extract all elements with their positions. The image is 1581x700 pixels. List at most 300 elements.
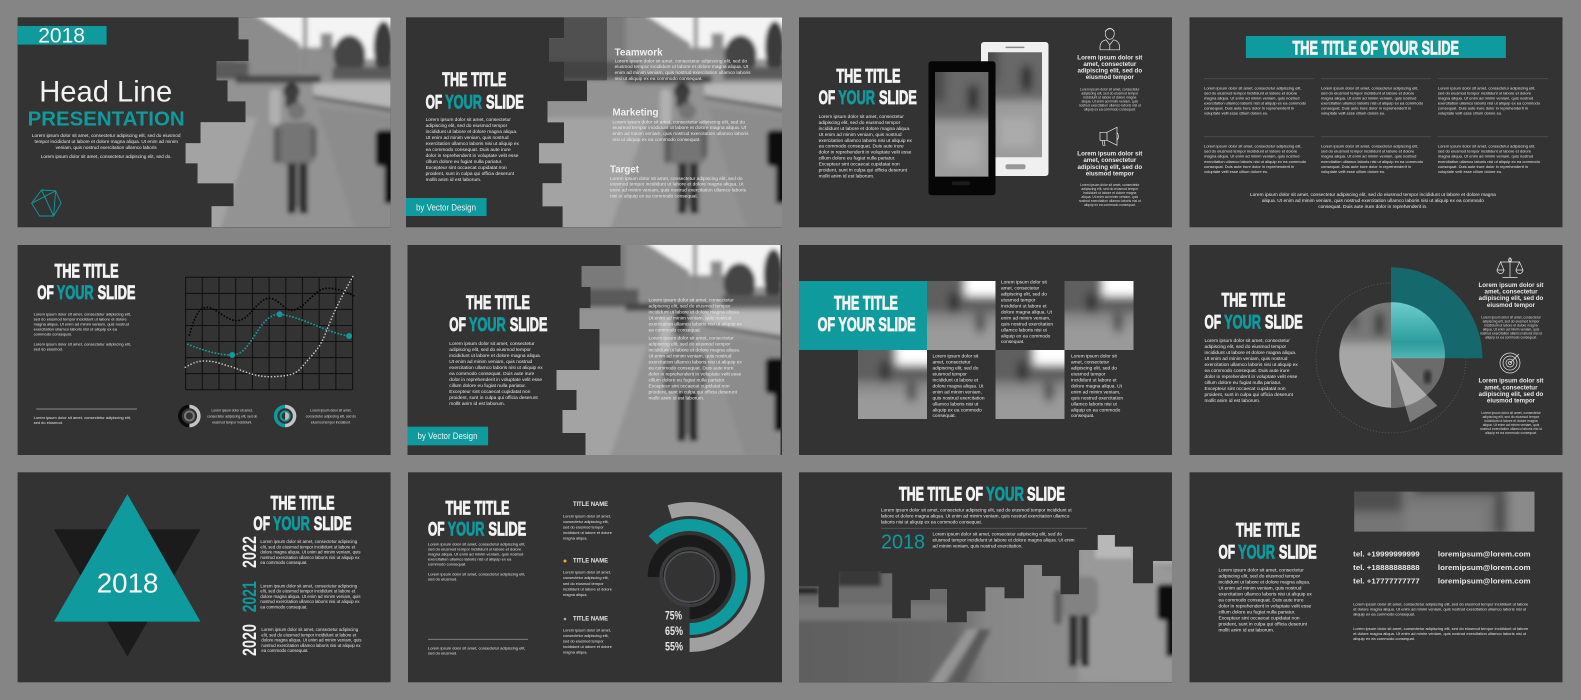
text over photo: Lorem ipsum dolor sit amet, consectetur: [648, 335, 734, 341]
phone numbers: tel. +19999999999: [1353, 550, 1420, 559]
title: YOUR: [469, 315, 506, 336]
footer note: sed do eiusmod.: [428, 650, 457, 655]
text tile three: adipiscing elit, sed do: [1071, 366, 1117, 372]
text tile two: adipiscing elit, sed do: [932, 366, 979, 372]
blurred photo banner: [1342, 480, 1547, 544]
text tile three: amet, consectetur: [1071, 360, 1110, 366]
body text: Excepteur sint occaecat cupidatat non: [449, 389, 531, 395]
feature text two: Lorem ipsum dolor sit amet, consectetur: [1080, 183, 1140, 187]
title: THE TITLE: [1236, 521, 1300, 542]
email addresses: loremipsum@lorem.com: [1438, 550, 1531, 559]
feature text two: eiusmod tempor: [1086, 170, 1134, 177]
phone numbers: [1353, 550, 1420, 585]
photo tile four: [984, 338, 1076, 431]
body text: Ut enim ad minim veniam, quis nostrud: [1204, 356, 1288, 362]
text column top right: voluptate velit esse cillum dolore eu.: [1438, 111, 1502, 116]
feature text one: nostrud exercitation ullamco laboris nisi ut: [1079, 103, 1141, 107]
text tile one: amet, consectetur: [1001, 286, 1040, 292]
title: SLIDE: [1265, 312, 1303, 333]
legend item one: incididunt ut labore et dolore: [563, 530, 612, 535]
feature text two: incididunt ut labore et dolore magna: [1484, 419, 1538, 423]
text column top right: sed do eiusmod tempor incididunt ut labore et dolore: [1438, 90, 1532, 95]
photo tile three: [846, 338, 939, 431]
photo tile two: [1052, 269, 1146, 362]
text tile two: quis nostrud exercitation: [932, 395, 985, 401]
panel: three column slide: [1190, 17, 1562, 227]
footer note: [428, 639, 528, 655]
body text: magna aliqua. Ut enim ad minim veniam, quis nostrud: [34, 322, 129, 326]
body text: Lorem ipsum dolor sit amet, consectetur adipiscing elit,: [34, 341, 131, 346]
panel: photo and text slide: [408, 245, 782, 455]
body text: proident, sunt in culpa qui officia deserunt: [1204, 392, 1294, 398]
body text: mollit anim id est laborum.: [1218, 628, 1274, 634]
text tile one: consequat.: [1001, 339, 1024, 345]
body text: Excepteur sint occaecat cupidatat non: [1218, 616, 1300, 622]
body text: exercitation ullamco laboris nisi ut aliquip ex ea: [428, 557, 512, 562]
target block: eiusmod tempor incididunt ut labore et dolore magna aliqua. Ut: [610, 182, 744, 188]
title: THE TITLE: [1222, 291, 1286, 312]
title: YOUR: [445, 92, 482, 113]
title: YOUR: [1224, 312, 1261, 333]
text over photo: incididunt ut labore et dolore magna aliqua.: [648, 347, 740, 353]
year label: 2018: [881, 531, 925, 553]
text column top middle: voluptate velit esse cillum dolore eu.: [1321, 111, 1385, 116]
line chart: [185, 274, 354, 390]
closing text: Lorem ipsum dolor sit amet, consectetur adipiscing elit, sed do eiusmod tempor incididunt ut labore et dolore magna: [1250, 192, 1496, 198]
email addresses: [1438, 550, 1531, 585]
title: [37, 262, 135, 304]
body text: sed do eiusmod tempor incididunt ut labore et dolore: [34, 316, 128, 321]
donut icon two: [276, 406, 295, 426]
body text: Lorem ipsum dolor sit amet, consectetur adipiscing elit,: [428, 541, 525, 546]
text tile one: ullamco laboris nisi ut: [1001, 327, 1048, 333]
legend item one: magna aliqua.: [563, 536, 587, 541]
title: YOUR: [448, 519, 485, 540]
title: SLIDE: [1027, 485, 1065, 506]
feature text two: [1479, 378, 1544, 435]
text tile one: adipiscing elit, sed do: [1001, 292, 1047, 298]
text tile one: enim ad minim veniam,: [1001, 315, 1050, 321]
title: SLIDE: [488, 519, 526, 540]
feature text two: nostrud exercitation ullamco laboris nisi ut: [1079, 199, 1141, 203]
note one: aliquip ex ea commodo consequat.: [1353, 611, 1415, 616]
teamwork block: nisi ut aliquip ex ea commodo consequat.: [615, 76, 703, 82]
text column top middle: magna aliqua. Ut enim ad minim veniam, quis nostrud: [1321, 95, 1416, 100]
body text: dolor in reprehenderit in voluptate velit esse: [819, 150, 912, 156]
body text: dolor in reprehenderit in voluptate velit esse: [449, 377, 542, 383]
intro text: laboris nisi ut aliquip ex ea commodo consequat.: [881, 519, 982, 524]
feature text two: aliquip ex ea commodo consequat.: [1485, 431, 1537, 435]
body text: cillum dolore eu fugiat nulla pariatur.: [1218, 610, 1295, 616]
body text: exercitation ullamco laboris nisi ut aliquip ex: [1204, 362, 1298, 368]
teal triangle: [54, 494, 201, 622]
note one: et dolore magna aliqua. Ut enim ad minim veniam, quis nostrud exercitation ullamco laboris nisi ut: [1353, 606, 1527, 611]
body text: cillum dolore eu fugiat nulla pariatur.: [1204, 380, 1281, 386]
feature text one: incididunt ut labore et dolore magna: [1484, 323, 1538, 327]
body text: dolor in reprehenderit in voluptate velit esse: [1218, 604, 1312, 610]
text tile one: aliquip ex ea commodo: [1001, 333, 1051, 339]
body text: exercitation ullamco laboris nisi ut aliquip ex ea: [34, 327, 118, 332]
panel: skyline photo slide: [799, 472, 1172, 682]
marketing block: enim ad minim veniam, quis nostrud exercitation ullamco laboris: [612, 131, 749, 137]
feature text one: aliquip ex ea commodo consequat.: [1485, 335, 1537, 339]
body text: Ut enim ad minim veniam, quis nostrud: [1218, 586, 1302, 592]
intro text: Lorem ipsum dolor sit amet, consectetur adipiscing elit, sed do.: [41, 154, 172, 159]
text tile one: Lorem ipsum dolor sit: [1001, 280, 1048, 286]
year text: Lorem ipsum dolor sit amet, consectetur adipiscing elit, sed do: [932, 532, 1062, 537]
body text: adipiscing elit, sed do eiusmod tempor: [426, 123, 508, 129]
text column top left: voluptate velit esse cillum dolore eu.: [1204, 111, 1268, 116]
text tile two: enim ad minim veniam,: [932, 389, 982, 395]
text column bottom left: Lorem ipsum dolor sit amet, consectetur adipiscing elit,: [1204, 144, 1301, 149]
title banner: THE TITLE OF YOUR SLIDE: [1292, 38, 1459, 59]
title: THE TITLE OF: [899, 485, 983, 506]
credit badge: by Vector Design: [416, 202, 476, 212]
legend item one: Lorem ipsum dolor sit amet,: [563, 513, 611, 518]
legend item three: sed do eiusmod tempor: [563, 638, 604, 643]
body text: Excepteur sint occaecat cupidatat non: [819, 162, 900, 168]
intro text: Lorem ipsum dolor sit amet, consectetur adipiscing elit, sed do eiusmod tempor incididunt ut: [881, 507, 1072, 512]
text column bottom left: exercitation ullamco laboris nisi ut aliquip ex ea commodo: [1204, 159, 1307, 164]
entry text 2021: elit, sed do eiusmod tempor incididunt ut labore et: [260, 589, 356, 594]
marketing block: nisi ut aliquip ex ea commodo consequat.: [612, 137, 700, 143]
legend item three: Lorem ipsum dolor sit amet,: [563, 627, 611, 632]
text column bottom right: magna aliqua. Ut enim ad minim veniam, quis nostrud: [1438, 154, 1533, 159]
panel: phones slide: [799, 17, 1172, 227]
teamwork block: enim ad minim veniam, quis nostrud exercitation ullamco laboris: [615, 70, 751, 76]
feature text one: aliquip ex ea commodo consequat.: [1084, 107, 1136, 111]
radial chart: [1316, 267, 1482, 433]
icon: megaphone: [1100, 127, 1118, 145]
feature text two: nostrud exercitation ullamco laboris nisi ut: [1480, 427, 1542, 431]
text column bottom left: voluptate velit esse cillum dolore eu.: [1204, 169, 1268, 174]
body text: proident, sunt in culpa qui officia deserunt: [1218, 622, 1308, 628]
marketing block: Lorem ipsum dolor sit amet, consectetur adipiscing elit, sed do: [612, 119, 745, 125]
body text: Ut enim ad minim veniam, quis nostrud: [426, 135, 509, 141]
title: OF: [819, 88, 835, 109]
text tile two: eiusmod tempor: [932, 372, 967, 378]
title: [428, 498, 526, 540]
title: [1204, 291, 1303, 333]
text over photo: exercitation ullamco laboris nisi ut aliquip ex: [648, 359, 742, 365]
title: SLIDE: [486, 92, 524, 113]
text column bottom right: voluptate velit esse cillum dolore eu.: [1438, 169, 1502, 174]
phone numbers: tel. +17777777777: [1353, 576, 1420, 585]
text over photo: Ut enim ad minim veniam, quis nostrud: [648, 316, 732, 322]
text column bottom right: consequat. Duis aute irure dolor in reprehenderit in: [1438, 164, 1528, 169]
panel: contact slide: [1190, 472, 1562, 682]
feature text two: amet, consectetur: [1083, 157, 1137, 164]
text over photo: mollit anim id est laborum.: [648, 395, 704, 401]
feature text one: adipiscing elit, sed do eiusmod tempor: [1483, 319, 1540, 323]
year text: ad minim veniam, quis nostrud exercitation.: [932, 543, 1023, 548]
feature text one: amet, consectetur: [1485, 289, 1538, 296]
title: OF: [449, 315, 466, 336]
entry text 2022: ea commodo consequat.: [260, 560, 307, 565]
text tile three: Lorem ipsum dolor sit: [1071, 354, 1118, 360]
body text: sed do eiusmod tempor incididunt ut labore et dolore: [428, 546, 522, 551]
feature text two: [1077, 151, 1142, 207]
entry text 2022: elit, sed do eiusmod tempor incididunt ut labore et: [260, 544, 356, 549]
text tile three: dolore magna aliqua. Ut: [1071, 383, 1123, 389]
body text: Ut enim ad minim veniam, quis nostrud: [819, 132, 902, 138]
feature text one: aliqua. Ut enim ad minim veniam, quis: [1483, 327, 1540, 331]
body text: commodo consequat.: [34, 332, 72, 337]
legend item one: consectetur adipiscing elit,: [563, 519, 609, 524]
feature text two: Lorem ipsum dolor sit: [1479, 378, 1543, 385]
body text: proident, sunt in culpa qui officia deserunt: [426, 171, 515, 177]
footer note: Lorem ipsum dolor sit amet, consectetur adipiscing elit,: [34, 415, 131, 420]
feature text two: incididunt ut labore et dolore magna: [1083, 191, 1137, 195]
marketing block: [612, 108, 749, 143]
legend item three: TITLE NAME: [573, 616, 609, 623]
text column top middle: exercitation ullamco laboris nisi ut aliquip ex ea commodo: [1321, 101, 1424, 106]
body text: adipiscing elit, sed do eiusmod tempor: [449, 347, 531, 353]
text over photo: adipiscing elit, sed do eiusmod tempor: [648, 341, 730, 347]
feature text one: Lorem ipsum dolor sit: [1479, 282, 1543, 289]
body text: Lorem ipsum dolor sit amet, consectetur: [449, 341, 535, 347]
body text: ea commodo consequat. Duis aute irure: [1218, 598, 1304, 604]
text tile three: quis nostrud exercitation: [1071, 395, 1123, 401]
credit badge: [406, 198, 487, 216]
title: OF: [1204, 312, 1221, 333]
body text: adipiscing elit, sed do eiusmod tempor: [1204, 344, 1286, 350]
body text: Lorem ipsum dolor sit amet, consectetur: [1218, 568, 1304, 574]
panel: cover slide: [18, 17, 391, 228]
year badge: [18, 24, 107, 47]
intro text: Lorem ipsum dolor sit amet, consectetur adipiscing elit, sed do eiusmod: [32, 133, 181, 138]
donut icon one: [180, 406, 199, 426]
body text: Lorem ipsum dolor sit amet, consectetur adipiscing elit,: [428, 572, 525, 577]
text over photo: dolor in reprehenderit in voluptate velit esse: [648, 371, 742, 377]
value labels: 65%: [665, 626, 683, 638]
year label 2020: 2020: [240, 624, 261, 656]
text over photo: adipiscing elit, sed do eiusmod tempor: [648, 304, 730, 310]
title: THE TITLE: [446, 498, 510, 519]
text column bottom middle: consequat. Duis aute irure dolor in reprehenderit in: [1321, 164, 1411, 169]
feature text two: adipiscing elit, sed do: [1479, 391, 1544, 398]
text column top right: Lorem ipsum dolor sit amet, consectetur adipiscing elit,: [1438, 85, 1535, 90]
title block: THE TITLE: [834, 294, 898, 315]
entry text 2020: dolore magna aliqua. Ut enim ad minim veniam, quis: [261, 638, 361, 643]
text column top left: sed do eiusmod tempor incididunt ut labore et dolore: [1204, 90, 1298, 95]
body text: cillum dolore eu fugiat nulla pariatur.: [819, 156, 895, 162]
feature text two: adipiscing elit, sed do eiusmod tempor: [1483, 415, 1540, 419]
legend item two: incididunt ut labore et dolore: [563, 586, 612, 591]
headline: Head Line: [39, 76, 172, 109]
feature text two: adipiscing elit, sed do: [1077, 164, 1142, 171]
text over photo: ea commodo consequat. Duis aute irure: [648, 365, 734, 371]
text tile two: Lorem ipsum dolor sit: [932, 354, 979, 360]
legend item two: [563, 558, 612, 597]
donut caption one: eiusmod tempor incididunt.: [212, 420, 252, 424]
photo with stepped edge: [556, 245, 780, 455]
title: OF: [37, 283, 54, 304]
text tile three: enim ad minim veniam,: [1071, 389, 1120, 395]
text tile three: ullamco laboris nisi ut: [1071, 401, 1118, 407]
feature text one: Lorem ipsum dolor sit amet, consectetur: [1481, 315, 1542, 319]
entry text 2020: nostrud exercitation ullamco laboris nisi ut aliquip ex: [261, 643, 361, 648]
entry text 2020: Lorem ipsum dolor sit amet, consectetur adipiscing: [261, 627, 359, 632]
entry text 2020: elit, sed do eiusmod tempor incididunt ut labore et: [261, 632, 357, 637]
legend item two: magna aliqua.: [563, 592, 587, 597]
black phone: [923, 60, 1000, 195]
year badge: 2018: [38, 24, 85, 47]
donut caption one: consectetur adipiscing elit, sed do: [207, 414, 257, 418]
entry text 2022: Lorem ipsum dolor sit amet, consectetur adipiscing: [260, 539, 358, 544]
feature text one: amet, consectetur: [1083, 61, 1137, 68]
text tile three: aliquip ex ea commodo: [1071, 407, 1121, 413]
target block: enim ad minim veniam, quis nostrud exercitation ullamco laboris: [610, 188, 747, 194]
intro text: labore et dolore magna aliqua. Ut enim ad minim veniam, quis nostrud exercitation ullamco: [881, 513, 1070, 518]
text tile three: incididunt ut labore et: [1071, 378, 1117, 384]
title: YOUR: [273, 514, 310, 535]
text column bottom middle: voluptate velit esse cillum dolore eu.: [1321, 169, 1385, 174]
target block: Target: [610, 164, 640, 175]
note two: Lorem ipsum dolor sit amet, consectetur adipiscing elit, sed do eiusmod tempor incididunt ut labore: [1353, 626, 1529, 631]
entry text 2021: Lorem ipsum dolor sit amet, consectetur adipiscing: [260, 583, 358, 588]
icon: hexagon: [32, 190, 61, 216]
body text: sed do eiusmod.: [34, 346, 63, 351]
title banner: [1246, 36, 1506, 59]
intro text: tempor incididunt ut labore et dolore magna aliqua. Ut enim ad minim: [35, 139, 178, 144]
title: OF: [253, 514, 270, 535]
text tile two: incididunt ut labore et: [932, 378, 979, 384]
text over photo: cillum dolore eu fugiat nulla pariatur.: [648, 377, 725, 383]
panel: radial photo slide: [1190, 245, 1562, 455]
year text: eiusmod tempor incididunt ut labore et dolore magna aliqua. Ut enim: [932, 537, 1075, 542]
entry text 2021: nostrud exercitation ullamco laboris nisi ut aliquip ex: [260, 599, 360, 604]
legend item one: TITLE NAME: [573, 501, 609, 508]
text over photo: exercitation ullamco laboris nisi ut aliquip ex: [648, 322, 742, 328]
body text: Lorem ipsum dolor sit amet, consectetur: [426, 117, 511, 123]
body text: cillum dolore eu fugiat nulla pariatur.: [426, 159, 502, 165]
feature text one: adipiscing elit, sed do eiusmod tempor: [1081, 91, 1139, 95]
text over photo: incididunt ut labore et dolore magna aliqua.: [648, 310, 740, 316]
icon: target: [1500, 353, 1520, 373]
title: [426, 70, 524, 113]
credit badge: by Vector Design: [418, 431, 478, 441]
note two: aliquip ex ea commodo consequat.: [1353, 636, 1415, 641]
photo with stepped edge: [539, 17, 782, 228]
title: SLIDE: [510, 315, 548, 336]
entry text 2021: ea commodo consequat.: [260, 604, 307, 609]
closing text: aliqua. Ut enim ad minim veniam, quis nostrud exercitation ullamco laboris nisi ut aliquip ex ea commodo: [1262, 198, 1484, 204]
teamwork block: [615, 47, 751, 82]
title: SLIDE: [879, 88, 917, 109]
feature text one: Lorem ipsum dolor sit: [1077, 54, 1142, 61]
body text: ea commodo consequat. Duis aute irure: [449, 371, 535, 377]
icon: scales: [1497, 257, 1523, 278]
subtitle: PRESENTATION: [28, 108, 185, 130]
feature text one: [1479, 282, 1544, 339]
body text: Lorem ipsum dolor sit amet, consectetur: [1204, 338, 1290, 344]
entry text 2021: dolore magna aliqua. Ut enim ad minim veniam, quis: [260, 594, 360, 599]
feature text one: adipiscing elit, sed do: [1479, 295, 1544, 302]
text column top right: exercitation ullamco laboris nisi ut aliquip ex ea commodo: [1438, 101, 1541, 106]
title: THE TITLE: [442, 70, 506, 91]
text column top left: magna aliqua. Ut enim ad minim veniam, quis nostrud: [1204, 95, 1299, 100]
entry text 2022: dolore magna aliqua. Ut enim ad minim veniam, quis: [260, 550, 360, 555]
text column bottom middle: Lorem ipsum dolor sit amet, consectetur adipiscing elit,: [1321, 144, 1418, 149]
body text: dolor in reprehenderit in voluptate velit esse: [426, 153, 519, 159]
legend item three: magna aliqua.: [563, 650, 587, 655]
body text: incididunt ut labore et dolore magna aliqua.: [449, 353, 541, 359]
text column top left: exercitation ullamco laboris nisi ut aliquip ex ea commodo: [1204, 101, 1307, 106]
credit badge: [408, 427, 488, 445]
intro text: veniam, quis nostrud exercitation ullamco laboris: [56, 145, 157, 150]
title: [449, 293, 548, 336]
body text: Lorem ipsum dolor sit amet, consectetur: [819, 114, 904, 120]
email addresses: loremipsum@lorem.com: [1438, 563, 1531, 572]
legend item three: consectetur adipiscing elit,: [563, 633, 609, 638]
panel: ring chart slide: [408, 472, 782, 682]
photo tile one: [915, 269, 1007, 362]
legend item one: sed do eiusmod tempor: [563, 524, 604, 529]
title: YOUR: [986, 485, 1024, 506]
title: [819, 67, 917, 109]
donut caption two: Lorem ipsum dolor sit amet,: [310, 409, 352, 413]
text over photo: Excepteur sint occaecat cupidatat non: [648, 383, 730, 389]
footer note: Lorem ipsum dolor sit amet, consectetur adipiscing elit,: [428, 645, 525, 650]
feature text two: Lorem ipsum dolor sit: [1077, 151, 1142, 158]
title: OF: [1218, 542, 1235, 563]
donut caption two: eiusmod tempor incididunt.: [311, 420, 351, 424]
title: OF: [426, 92, 442, 113]
title block: [799, 281, 927, 350]
entry text 2022: nostrud exercitation ullamco laboris nisi ut aliquip ex: [260, 555, 360, 560]
feature text one: nostrud exercitation ullamco laboris nisi ut: [1480, 331, 1542, 335]
text column top left: Lorem ipsum dolor sit amet, consectetur adipiscing elit,: [1204, 85, 1301, 90]
donut caption two: consectetur adipiscing elit, sed do: [306, 414, 356, 418]
body text: mollit anim id est laborum.: [1204, 398, 1260, 404]
body text: incididunt ut labore et dolore magna aliqua.: [1204, 350, 1296, 356]
icon: person: [1100, 28, 1120, 50]
body text: mollit anim id est laborum.: [449, 401, 505, 407]
marketing block: Marketing: [612, 108, 658, 119]
legend item two: consectetur adipiscing elit,: [563, 575, 609, 580]
title: OF: [428, 519, 445, 540]
feature text two: Lorem ipsum dolor sit amet, consectetur: [1481, 411, 1542, 415]
body text: ea commodo consequat. Duis aute irure: [819, 144, 904, 150]
text column top left: consequat. Duis aute irure dolor in reprehenderit in: [1204, 106, 1294, 111]
text column bottom middle: magna aliqua. Ut enim ad minim veniam, quis nostrud: [1321, 154, 1416, 159]
feature text two: amet, consectetur: [1485, 384, 1538, 391]
text over photo: Lorem ipsum dolor sit amet, consectetur: [648, 298, 734, 304]
title: [253, 493, 352, 535]
body text: magna aliqua. Ut enim ad minim veniam, quis nostrud: [428, 551, 523, 556]
text tile three: eiusmod tempor: [1071, 372, 1106, 378]
email addresses: loremipsum@lorem.com: [1438, 576, 1531, 585]
panel: teamwork slide: [406, 17, 782, 228]
body text: Ut enim ad minim veniam, quis nostrud: [449, 359, 533, 365]
target block: Lorem ipsum dolor sit amet, consectetur adipiscing elit, sed do: [610, 176, 743, 182]
text column bottom right: sed do eiusmod tempor incididunt ut labore et dolore: [1438, 149, 1532, 154]
value labels: [665, 610, 683, 654]
text tile two: ullamco laboris nisi ut: [932, 401, 979, 407]
body text: exercitation ullamco laboris nisi ut aliquip ex: [1218, 592, 1312, 598]
text column bottom left: sed do eiusmod tempor incididunt ut labore et dolore: [1204, 149, 1298, 154]
text tile two: dolore magna aliqua. Ut: [932, 383, 984, 389]
feature text one: eiusmod tempor: [1086, 74, 1134, 81]
panel: line chart slide: [18, 245, 391, 455]
footer note: [34, 409, 137, 425]
title: SLIDE: [1279, 542, 1317, 563]
legend item one: [563, 501, 612, 541]
dark inverted triangle: [54, 529, 201, 657]
white phone: [976, 40, 1054, 176]
feature text one: Lorem ipsum dolor sit amet, consectetur: [1080, 87, 1140, 91]
